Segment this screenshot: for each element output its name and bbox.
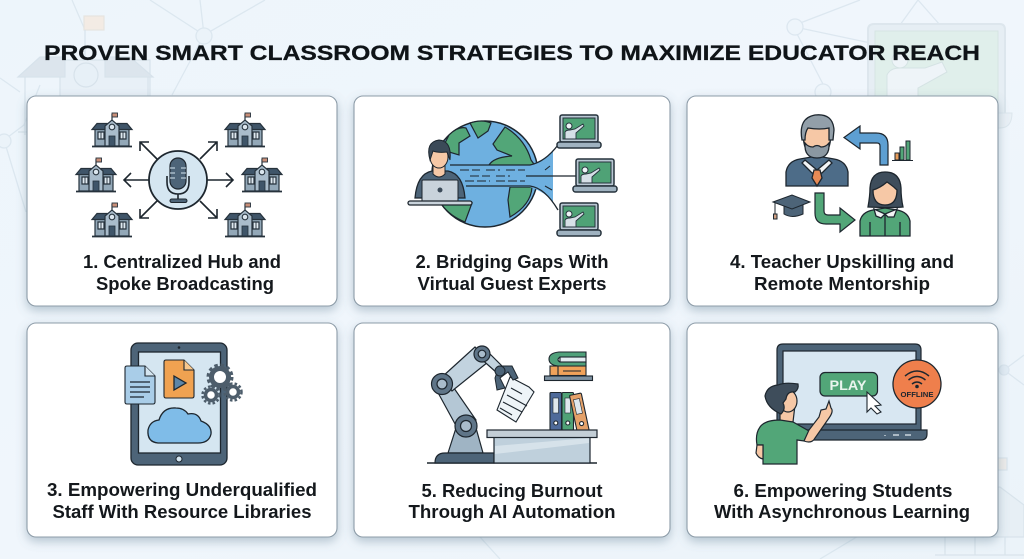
- label: [416, 251, 608, 294]
- label: Through AI Automation: [408, 501, 616, 522]
- label: 4. Teacher Upskilling and: [730, 251, 954, 272]
- icon: laptop middle: [573, 159, 617, 192]
- icon: globe: [432, 121, 538, 227]
- panel: virtual guest experts: [354, 96, 670, 306]
- icon: document: [125, 366, 155, 404]
- icon: microphone hub: [149, 151, 207, 209]
- icon: paper in gripper: [495, 366, 534, 422]
- icon: laptop bottom: [557, 203, 601, 236]
- label: Spoke Broadcasting: [96, 273, 274, 294]
- icon: tablet: [131, 343, 227, 465]
- label: With Asynchronous Learning: [714, 501, 970, 522]
- arrow: blue feedback: [844, 126, 888, 165]
- icon: video file: [164, 360, 194, 398]
- label: [83, 251, 281, 294]
- icon: cloud: [148, 408, 211, 443]
- panel: AI automation: [354, 323, 670, 537]
- title: PROVEN SMART CLASSROOM STRATEGIES TO MAXIMIZE EDUCATOR REACH: [44, 41, 980, 65]
- icon: robot arm: [427, 346, 597, 463]
- icon: presenter at laptop: [408, 140, 472, 205]
- label: 6. Empowering Students: [734, 480, 952, 501]
- play button: PLAY: [830, 378, 866, 393]
- icon: student mentee: [860, 172, 910, 236]
- label: Staff With Resource Libraries: [52, 501, 312, 522]
- arrow: green transfer: [815, 193, 855, 232]
- bar chart icon: [892, 141, 913, 160]
- label: 2. Bridging Gaps With: [416, 251, 608, 272]
- data streams funnel: [450, 145, 590, 210]
- panel: teacher upskilling: [687, 96, 998, 306]
- play button: [820, 372, 878, 396]
- icon: large laptop: [777, 344, 927, 440]
- icon: cursor: [867, 392, 881, 414]
- icon: senior teacher: [786, 115, 848, 186]
- label: 3. Empowering Underqualified: [47, 479, 317, 500]
- icon: school bottom left: [92, 203, 132, 236]
- icon: school middle left: [76, 158, 116, 192]
- icon: school bottom right: [225, 203, 265, 236]
- icon: student pointing: [756, 383, 832, 464]
- icon: school middle right: [242, 158, 282, 192]
- icon: school top right: [225, 113, 265, 146]
- label: 5. Reducing Burnout: [422, 480, 602, 501]
- icon: school top left: [92, 113, 132, 146]
- label: Virtual Guest Experts: [418, 273, 606, 294]
- panel: resource libraries: [27, 323, 337, 537]
- label: [730, 251, 954, 294]
- icon: offline badge: [893, 360, 941, 408]
- icon: gears: [202, 365, 242, 404]
- icon: laptop top: [557, 115, 601, 148]
- label: [408, 480, 616, 522]
- arrows: broadcast spokes: [124, 142, 233, 218]
- icon: desk: [487, 430, 597, 463]
- icon: offline badge: OFFLINE: [900, 390, 934, 399]
- icon: shelf with books: [544, 352, 592, 380]
- panel: centralized hub and spoke: [27, 96, 337, 306]
- label: [47, 479, 317, 522]
- label: [714, 480, 970, 522]
- label: 1. Centralized Hub and: [83, 251, 281, 272]
- label: Remote Mentorship: [754, 273, 930, 294]
- icon: graduation cap: [773, 195, 810, 219]
- panel: asynchronous learning: [687, 323, 998, 537]
- icon: binders: [550, 392, 589, 433]
